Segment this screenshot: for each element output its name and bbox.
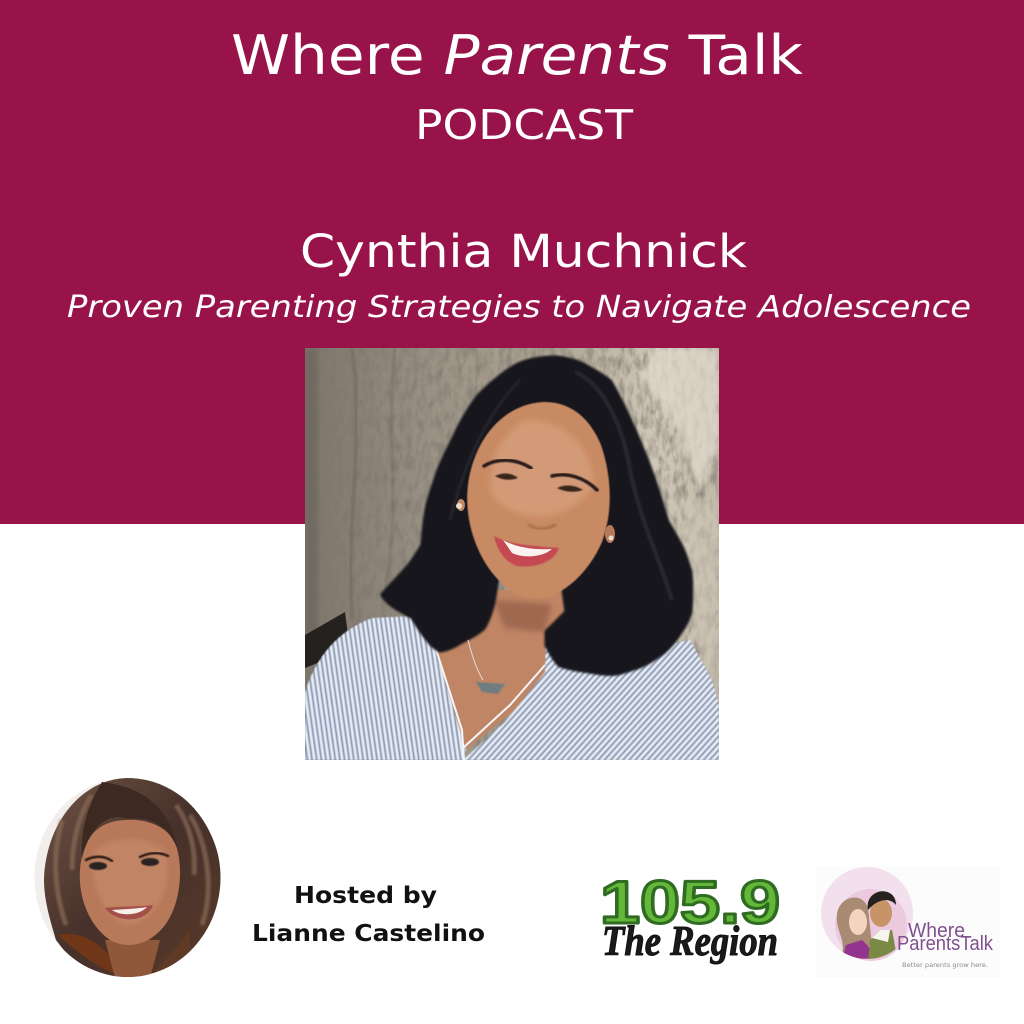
face	[467, 402, 610, 598]
host face	[80, 820, 180, 945]
logo wordmark: Where	[908, 920, 965, 942]
host eyes and brows	[86, 853, 168, 861]
host hair	[44, 778, 222, 978]
tree bark background	[305, 348, 719, 760]
nose	[528, 524, 556, 529]
dark shoulder shadow	[305, 612, 350, 668]
host portrait	[30, 778, 226, 978]
neck and chest	[438, 590, 565, 750]
hair	[383, 358, 691, 673]
host smile	[105, 905, 153, 919]
hosted by line: Hosted by	[294, 883, 437, 909]
host neck	[105, 940, 160, 978]
guest name: Cynthia Muchnick	[300, 225, 747, 278]
striped shirt left	[305, 616, 466, 760]
where parents talk logo: ParentsTalk	[897, 933, 994, 955]
eyebrows	[484, 460, 531, 468]
necklace	[468, 640, 505, 694]
logo couple	[837, 891, 898, 962]
striped shirt right	[464, 640, 719, 760]
title: Where Parents Talk	[231, 24, 804, 87]
radio station logo	[600, 869, 780, 965]
host bangs	[82, 782, 178, 858]
shirt collar line	[435, 648, 546, 760]
podcast label: PODCAST	[415, 101, 634, 149]
host name: Lianne Castelino	[252, 921, 485, 947]
header band	[0, 0, 1024, 524]
frequency digits: 105.9	[600, 869, 780, 936]
logo tagline: Better parents grow here.	[902, 961, 988, 969]
where parents talk logo	[821, 867, 993, 968]
episode subtitle: Proven Parenting Strategies to Navigate Adolescence	[67, 290, 971, 325]
hosted by text	[252, 883, 485, 947]
logo circles	[821, 867, 913, 959]
eyes	[495, 474, 518, 480]
station name: The Region	[602, 919, 778, 965]
smile	[494, 536, 559, 567]
guest photo	[305, 348, 719, 760]
ears and earrings	[457, 499, 465, 511]
